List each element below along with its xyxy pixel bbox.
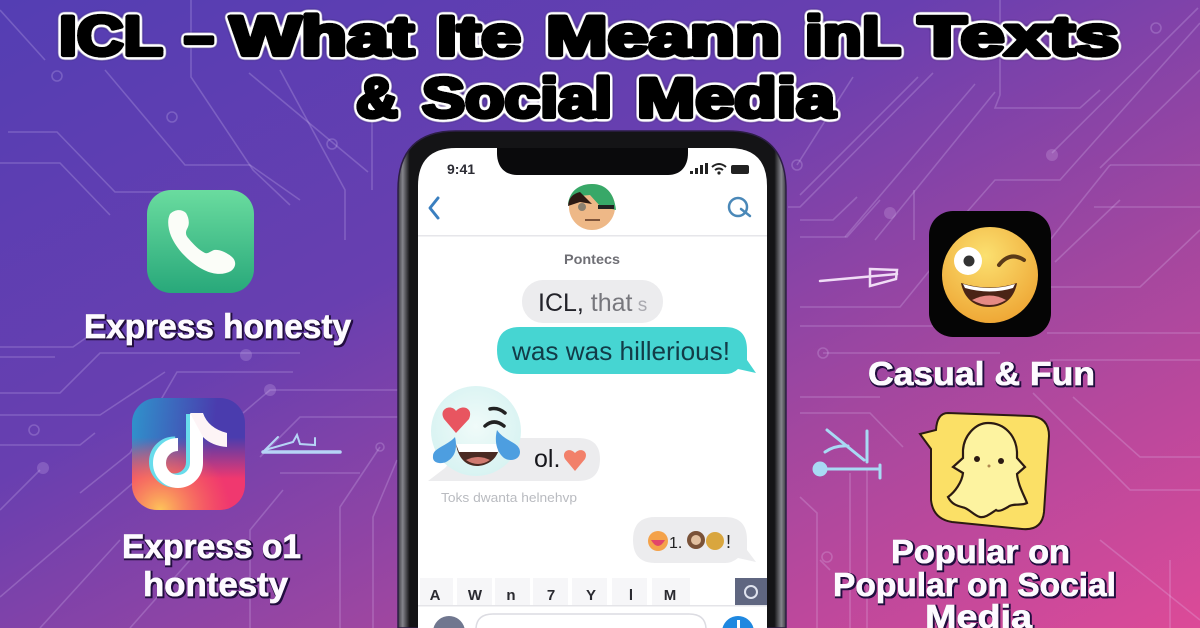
grey message bubble xyxy=(522,280,663,323)
grey message bubble with emoji: ol. xyxy=(534,445,560,473)
keyboard row: l xyxy=(629,587,633,604)
title: Social xyxy=(422,66,612,129)
label: popular on social media: Popular on Social xyxy=(833,566,1116,603)
message input bar xyxy=(434,614,754,628)
label: express o1 hontesty: Express o1 xyxy=(122,528,301,566)
notch xyxy=(497,148,688,175)
title: inL xyxy=(805,4,901,67)
arrow sketch xyxy=(814,430,880,478)
arrow sketch xyxy=(263,435,340,452)
circuit node dots xyxy=(37,149,1058,474)
phone mockup xyxy=(398,131,786,628)
icon: wink emoji xyxy=(929,211,1051,337)
label: popular on social media: Popular on xyxy=(891,533,1070,570)
phone frame xyxy=(398,131,786,628)
contact name: Pontecs xyxy=(564,251,620,267)
back chevron xyxy=(430,198,438,218)
status bar xyxy=(447,161,749,177)
title: ICL xyxy=(59,4,163,67)
label: express o1 hontesty xyxy=(122,528,301,604)
grey emoji bubble: 1. xyxy=(669,535,682,552)
teal message bubble: was was hillerious! xyxy=(511,336,730,366)
teal message bubble xyxy=(497,327,756,374)
label: casual and fun: Casual & Fun xyxy=(868,355,1095,392)
keyboard row: 7 xyxy=(547,587,555,604)
keyboard row xyxy=(418,578,767,606)
title: Meann xyxy=(546,4,780,67)
feature: express honesty (phone) xyxy=(84,190,351,346)
header divider xyxy=(418,235,767,236)
feature: popular on social media xyxy=(814,413,1116,628)
title: Ite xyxy=(437,4,521,67)
grey message bubble with emoji xyxy=(428,438,600,481)
icon: tiktok note xyxy=(132,398,245,510)
keyboard row: n xyxy=(506,587,516,604)
grey emoji bubble: ! xyxy=(726,532,731,552)
status bar: 9:41 xyxy=(447,161,475,177)
grey message bubble: ICL, that s xyxy=(538,289,647,317)
feature: express honesty (tiktok) xyxy=(122,398,340,604)
label: express honesty: Express honesty xyxy=(84,308,351,346)
avatar xyxy=(568,184,616,230)
heart emoji small xyxy=(564,450,586,471)
title: Media xyxy=(637,66,836,129)
icon: phone app xyxy=(147,190,254,293)
title: – xyxy=(184,4,214,67)
laughing emoji xyxy=(431,386,521,476)
label: popular on social media xyxy=(833,533,1116,628)
faint caption: Toks dwanta helnehvp xyxy=(441,490,577,505)
keyboard row: W xyxy=(468,587,483,604)
phone screen xyxy=(418,148,767,628)
search icon xyxy=(729,198,750,216)
keyboard row: M xyxy=(664,587,676,604)
keyboard row: A xyxy=(430,587,441,604)
feature: casual and fun xyxy=(820,211,1095,392)
title: What xyxy=(230,4,414,67)
icon: snapchat ghost speech bubble xyxy=(920,413,1049,529)
title xyxy=(59,4,1119,129)
title: Texts xyxy=(918,4,1119,67)
label: express o1 hontesty: hontesty xyxy=(143,566,288,604)
keyboard row: Y xyxy=(586,587,596,604)
arrow sketch xyxy=(820,269,897,286)
title: & xyxy=(356,66,398,129)
grey emoji bubble xyxy=(633,517,756,563)
